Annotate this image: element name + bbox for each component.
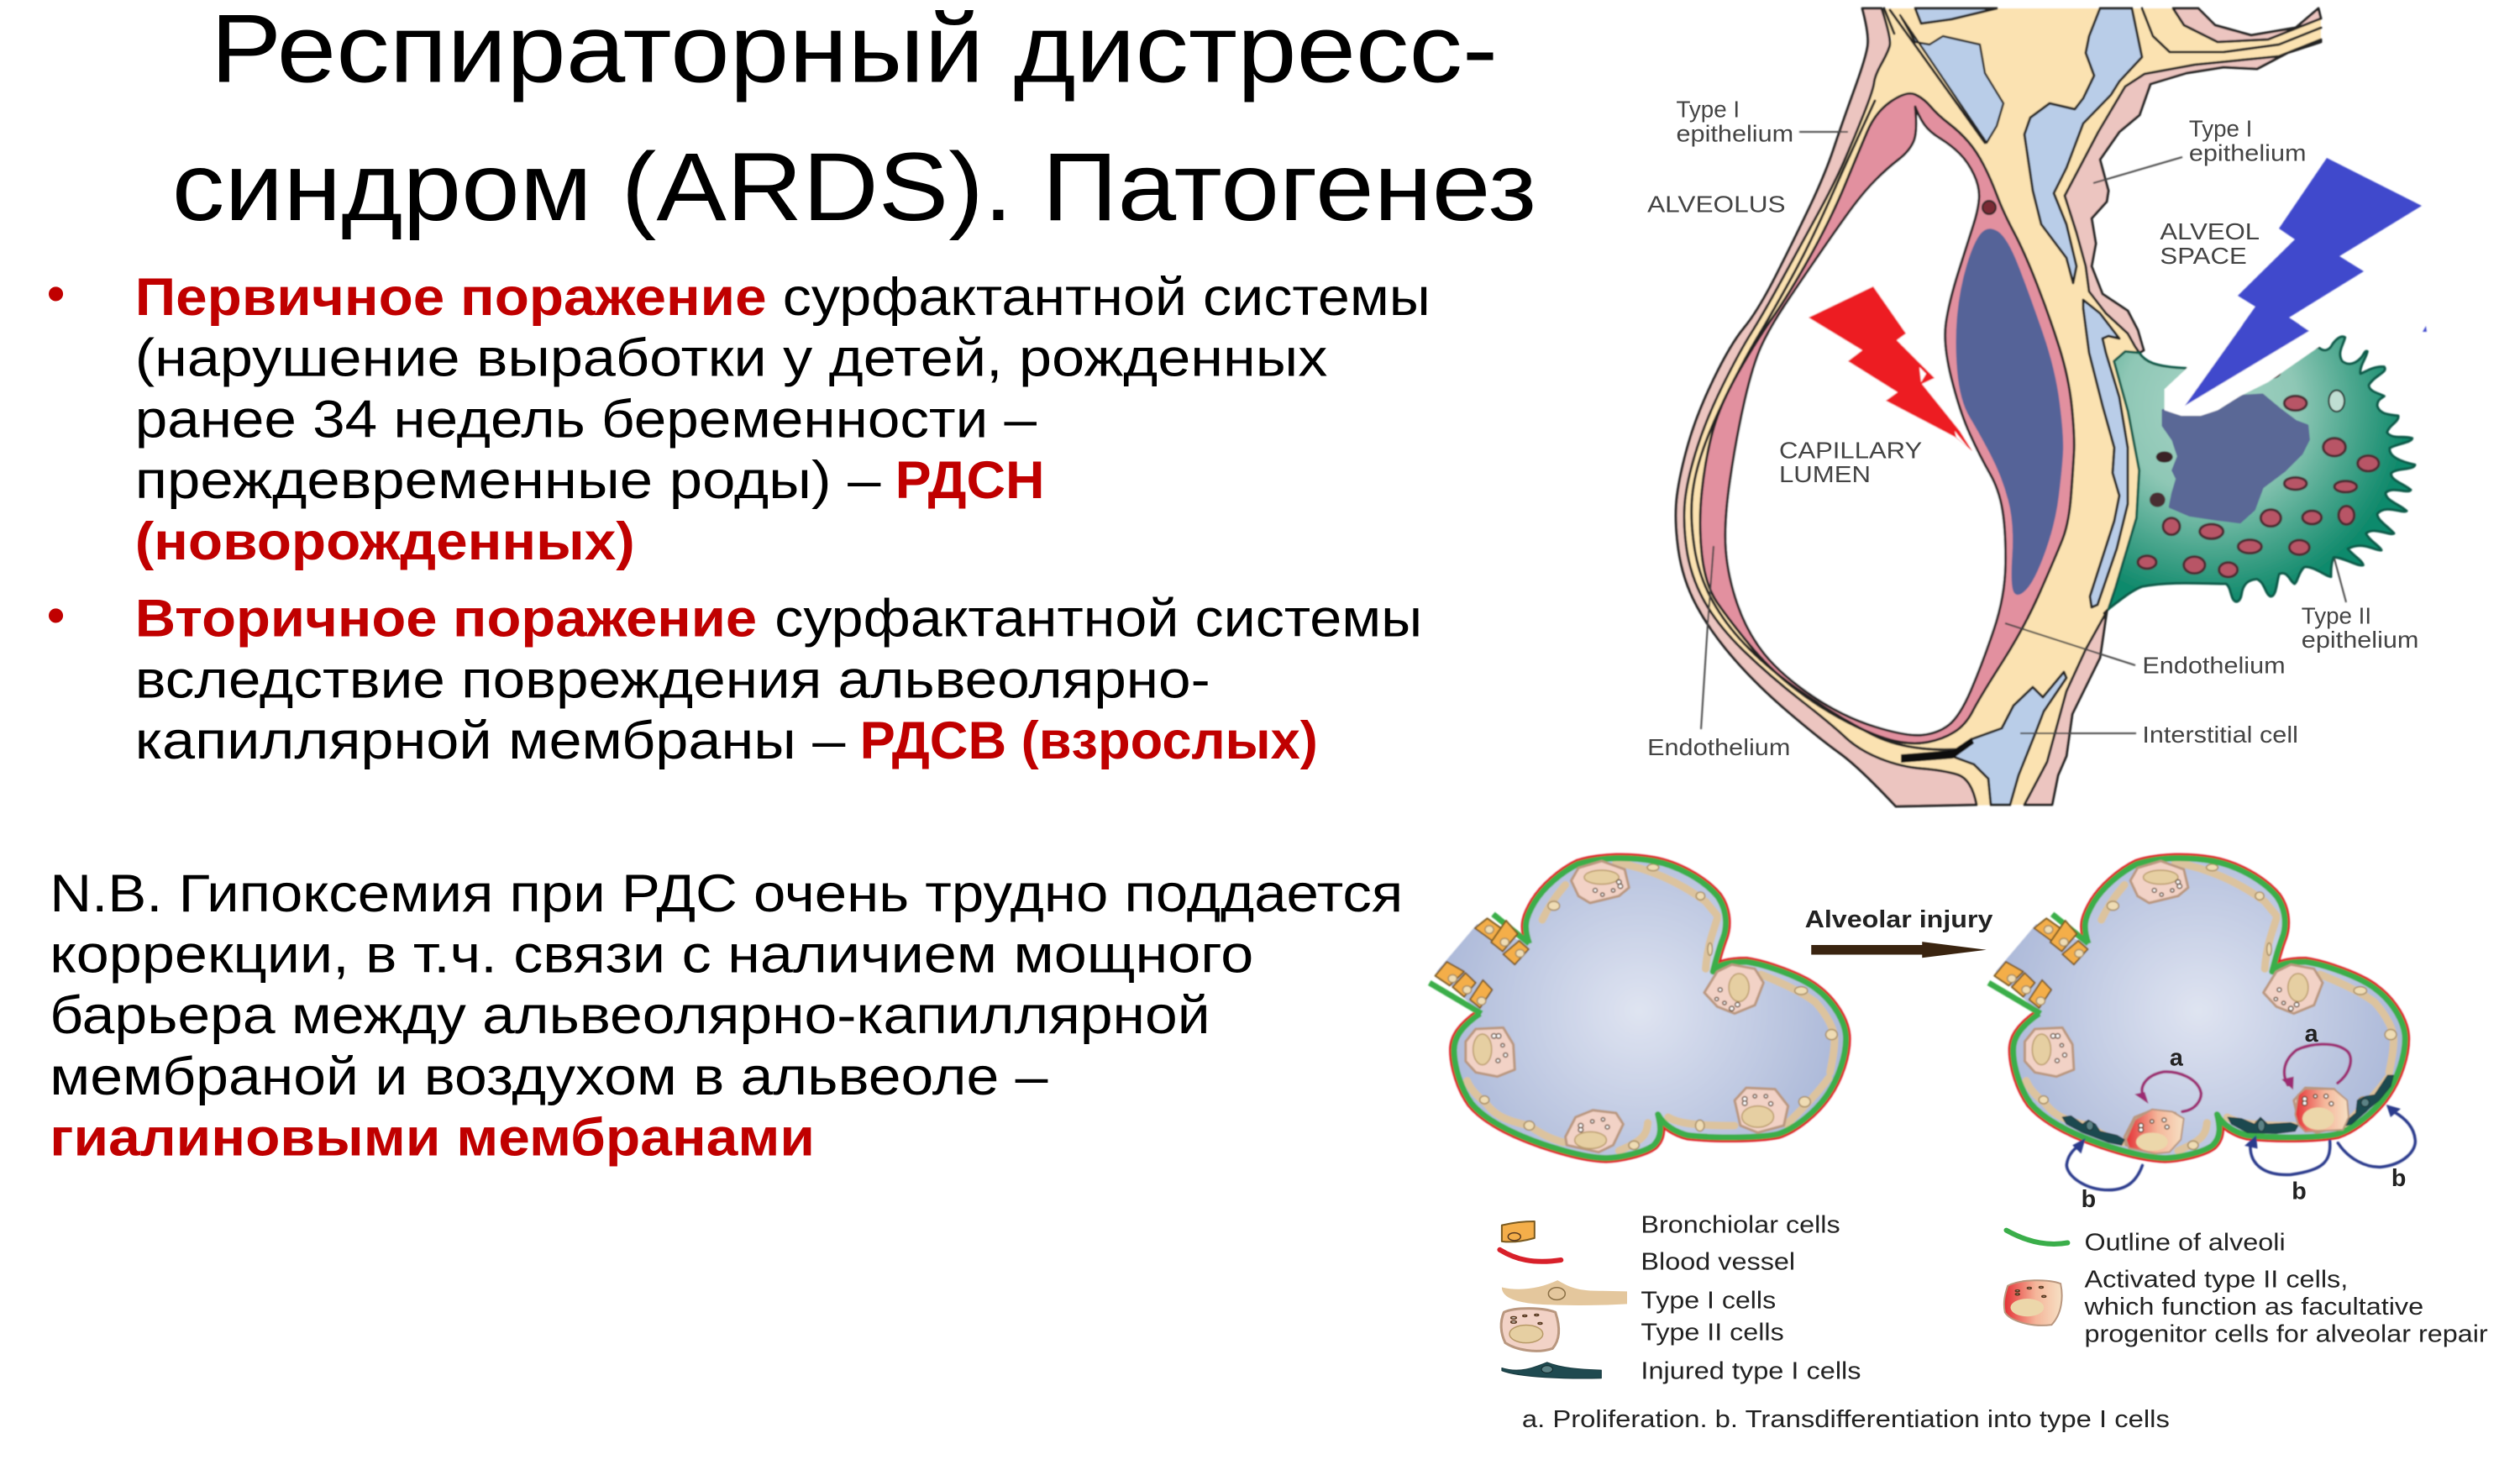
title: синдром (ARDS). Патогенез (172, 134, 1536, 241)
bullet: primary surfactant damage: ранее 34 недель беременности – (135, 390, 1037, 449)
legend labels (1522, 1211, 2488, 1433)
process letters (2082, 1021, 2406, 1213)
labels: wall cross-section: CAPILLARY (1779, 437, 1922, 463)
type II epithelium cell (2108, 325, 2415, 609)
legend labels: Activated type II cells, (2085, 1267, 2348, 1294)
bullet: secondary surfactant damage: вследствие повреждения альвеолярно- (135, 650, 1210, 709)
red blood cell (1956, 228, 2063, 595)
leader lines (1701, 132, 2346, 733)
labels: wall cross-section: Endothelium (1647, 734, 1790, 760)
bullet: secondary surfactant damage: капиллярной мембраны – (135, 711, 846, 770)
labels: wall cross-section: Endothelium (2142, 653, 2286, 679)
labels: wall cross-section: Type I (2189, 116, 2252, 142)
labels: wall cross-section: ALVEOL (2160, 218, 2260, 244)
process letters: b (2082, 1186, 2096, 1213)
bullet: secondary surfactant damage: РДСВ (взрослых) (860, 711, 1318, 770)
proliferation arrows (2134, 1044, 2350, 1111)
bullet: primary surfactant damage (46, 265, 1431, 571)
process letters: b (2391, 1165, 2406, 1192)
labels: wall cross-section: epithelium (2189, 139, 2307, 165)
lower-right wall band (2024, 612, 2107, 805)
legend labels: a. Proliferation. b. Transdifferentiation into type I cells (1522, 1406, 2170, 1433)
labels: wall cross-section: LUMEN (1779, 461, 1871, 487)
bullet: secondary surfactant damage: Вторичное поражение (135, 590, 757, 648)
legend labels: Blood vessel (1641, 1248, 1795, 1275)
labels: wall cross-section: epithelium (1677, 120, 1793, 146)
labels: wall cross-section (1647, 97, 2418, 760)
dark wedge (1901, 738, 1974, 763)
diagram: normal alveolus (1430, 858, 1846, 1158)
arrow: alveolar injury (1805, 906, 1992, 958)
icon: type I cell (1502, 1280, 1627, 1305)
activated type II cell left (2126, 1110, 2184, 1153)
peach interstitium (1683, 8, 2321, 806)
legend labels: Outline of alveoli (2085, 1230, 2286, 1257)
icon: blood vessel (1499, 1250, 1561, 1262)
bottom interstitial cell (1951, 672, 2066, 805)
bullet: primary surfactant damage: • (46, 265, 66, 323)
legend labels: Bronchiolar cells (1641, 1211, 1840, 1238)
icon: bronchiolar cell (1502, 1221, 1535, 1242)
icon: outline of alveoli (2006, 1231, 2067, 1244)
bullet: primary surfactant damage: сурфактантной системы (783, 268, 1431, 327)
central interstitial cell (2024, 8, 2142, 283)
activated type II cell right (2295, 1089, 2349, 1131)
icon: activated type II cell (2004, 1280, 2062, 1326)
labels: wall cross-section: Interstitial cell (2142, 722, 2298, 748)
text block: N.B. note (50, 864, 1403, 1168)
legend labels: progenitor cells for alveolar repair (2085, 1321, 2488, 1348)
text block: N.B. note: мембраной и воздухом в альвеоле – (50, 1047, 1048, 1106)
injured type I cells (2062, 1075, 2393, 1145)
capillary endothelium (1700, 93, 2074, 743)
labels: wall cross-section: Type I (1677, 97, 1740, 123)
bullet: secondary surfactant damage (46, 586, 1422, 770)
labels: wall cross-section: ALVEOLUS (1647, 192, 1786, 218)
title (172, 0, 1536, 241)
bullet: secondary surfactant damage: сурфактантной системы (774, 590, 1422, 648)
icon: injured type I cell (1502, 1362, 1601, 1378)
legend (1499, 1211, 2488, 1433)
legend labels: Injured type I cells (1641, 1358, 1861, 1385)
labels: wall cross-section: SPACE (2160, 243, 2247, 269)
right wall epithelium (2065, 39, 2321, 353)
blue lightning bolt (2185, 158, 2427, 406)
labels: wall cross-section: Type II (2302, 602, 2371, 628)
bullet: primary surfactant damage: Первичное поражение (135, 268, 767, 327)
labels: wall cross-section: epithelium (2302, 627, 2418, 653)
process letters: a (2305, 1021, 2319, 1047)
diagram: alveolar wall cross-section (1647, 8, 2427, 806)
bullet: primary surfactant damage: (новорожденных) (135, 512, 635, 571)
text block: N.B. note: гиалиновыми мембранами (50, 1109, 815, 1168)
bullet: secondary surfactant damage: • (46, 586, 66, 645)
process letters: b (2292, 1178, 2307, 1205)
top-right epithelium (2173, 8, 2321, 42)
text block: N.B. note: N.B. Гипоксемия при РДС очень трудно поддается (50, 864, 1403, 923)
lower-right interstitial strip (2083, 300, 2128, 607)
bullet: primary surfactant damage: РДСН (895, 451, 1045, 510)
capillary lumen (1725, 107, 2006, 735)
legend labels: Type II cells (1641, 1320, 1784, 1347)
wall contour lines (1692, 8, 2321, 749)
outer type I epithelium band (1676, 8, 1977, 806)
arrow: alveolar injury: Alveolar injury (1805, 906, 1992, 933)
diagram: injured alveolus (1988, 858, 2415, 1213)
bullet: primary surfactant damage: (нарушение выработки у детей, рожденных (135, 329, 1327, 388)
text block: N.B. note: барьера между альвеолярно-капиллярной (50, 986, 1210, 1045)
process letters: a (2170, 1044, 2184, 1071)
top-left interstitial cells (1900, 8, 2003, 143)
small cell body (1982, 201, 1996, 214)
legend labels: Type I cells (1641, 1287, 1776, 1314)
text block: N.B. note: коррекции, в т.ч. связи с наличием мощного (50, 926, 1253, 984)
red lightning bolt (1809, 286, 1972, 451)
transdifferentiation arrows (2066, 1105, 2415, 1190)
legend labels: which function as facultative (2083, 1294, 2423, 1320)
icon: type II cell (1501, 1309, 1559, 1351)
bullet: primary surfactant damage: преждевременные роды) – (135, 451, 881, 510)
